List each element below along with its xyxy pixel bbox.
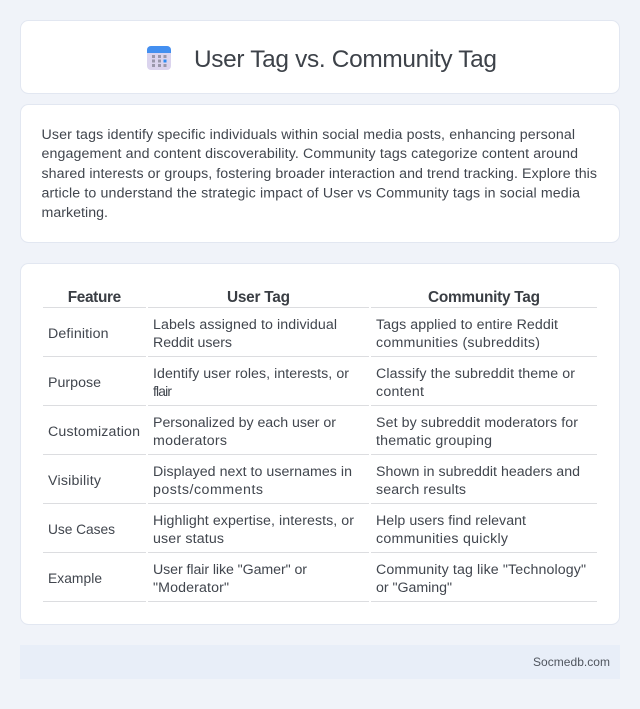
title: User Tag vs. Community Tag [194,46,497,73]
row: use cases: user status [153,531,224,547]
panel: comparison table [20,264,620,624]
row: customization: Personalized by each user or [153,415,336,431]
row: example: Community tag like "Technology" [376,562,586,578]
row: purpose: Identify user roles, interests, or [153,366,349,382]
row: definition: Tags applied to entire Reddit [376,317,558,333]
row: customization: Set by subreddit moderators for [376,415,578,431]
row: customization: Customization [48,424,140,440]
row: definition: Labels assigned to individual [153,317,337,333]
row: use cases [48,513,526,547]
intro paragraph: article to understand the strategic impact of User vs Community tags in social media [42,186,580,202]
table header row: Feature [68,289,122,306]
panel: title header [20,20,620,94]
row: definition [48,317,558,351]
icon: calendar [147,46,171,70]
table header row [68,289,540,306]
row: visibility: search results [376,482,466,498]
intro paragraph: shared interests or groups, fostering broader interaction and trend tracking. Explore this [42,166,597,182]
row: customization: thematic grouping [376,433,492,449]
row: definition: Reddit users [153,335,232,351]
row: purpose: Classify the subreddit theme or [376,366,575,382]
row: example: Example [48,571,102,586]
intro paragraph: marketing. [42,205,108,221]
row: visibility: Displayed next to usernames in [153,464,352,480]
row: definition: Definition [48,326,108,342]
row: visibility: Visibility [48,473,102,489]
panel: introduction [20,104,620,242]
table header row: User Tag [227,289,290,306]
row: purpose: content [376,384,424,400]
row: use cases: Use Cases [48,522,115,537]
intro paragraph: engagement and content discoverability. Community tags categorize content around [42,146,578,162]
intro paragraph [42,127,597,221]
footer bar [20,645,620,679]
row: use cases: communities quickly [376,531,509,547]
row: purpose: flair [153,384,172,399]
row: purpose: Purpose [48,375,101,391]
row: customization [48,415,578,449]
table header row: Community Tag [428,289,540,306]
footer source text: Socmedb.com [533,655,610,669]
row: definition: communities (subreddits) [376,335,540,351]
row: use cases: Help users find relevant [376,513,526,529]
row: visibility: posts/comments [153,482,263,498]
intro paragraph: User tags identify specific individuals within social media posts, enhancing personal [42,127,575,143]
row: visibility: Shown in subreddit headers and [376,464,580,480]
row: example [48,562,586,596]
row: purpose [48,366,575,400]
row: use cases: Highlight expertise, interests, or [153,513,354,529]
row: example: User flair like "Gamer" or [153,562,307,578]
row: example: "Moderator" [153,580,229,596]
row: example: or "Gaming" [376,580,452,596]
row: visibility [48,464,580,498]
row: customization: moderators [153,433,227,449]
